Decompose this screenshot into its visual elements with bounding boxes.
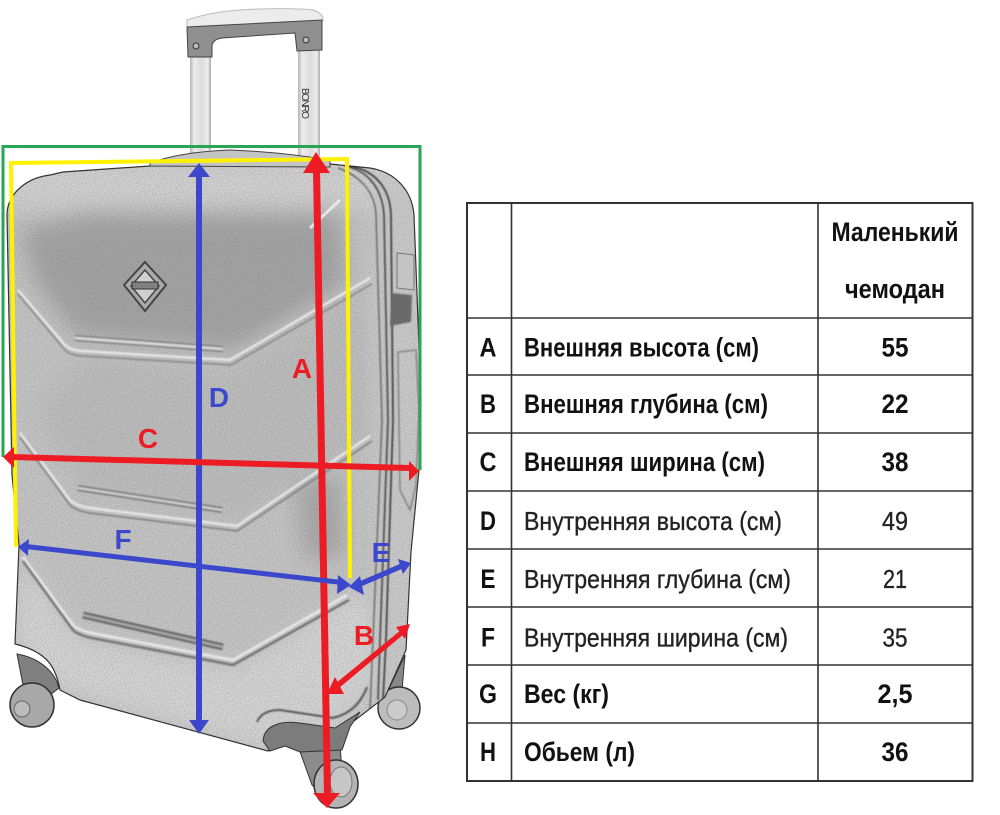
arrow F: inner width	[18, 539, 351, 594]
row A: A	[480, 332, 496, 362]
outline: yellow inner box	[11, 159, 350, 578]
table header	[832, 217, 958, 304]
row G: Вес (кг)	[524, 679, 609, 709]
arrow E: inner depth	[349, 559, 411, 595]
label E: E	[372, 537, 390, 568]
row F: 35	[882, 622, 908, 652]
row H: Обьем (л)	[524, 737, 635, 767]
icon: rear right wheel	[378, 655, 420, 729]
row C	[480, 447, 908, 477]
top carry handle	[150, 150, 330, 167]
label D: D	[209, 382, 229, 413]
row D: 49	[882, 506, 908, 536]
row H: H	[480, 737, 496, 767]
arrow B: outer depth	[327, 624, 410, 694]
label B: B	[354, 620, 374, 651]
label C: C	[138, 423, 158, 454]
label A: A	[292, 353, 312, 384]
lock	[390, 293, 412, 326]
row F: F	[481, 622, 495, 652]
arrow C: outer width	[3, 447, 419, 481]
row C: 38	[882, 447, 908, 477]
icon: telescopic handle: BONRO	[299, 88, 310, 119]
row F: Внутренняя ширина (см)	[524, 622, 788, 652]
icon: rear left wheel	[10, 654, 59, 727]
row C: Внешняя ширина (см)	[524, 447, 765, 477]
row E: 21	[883, 564, 907, 594]
row B	[480, 389, 908, 419]
row G	[479, 679, 912, 709]
row G: G	[479, 679, 497, 709]
row D	[480, 506, 908, 536]
row C: C	[480, 447, 496, 477]
row G: 2,5	[878, 679, 912, 709]
outline: green outer box	[3, 146, 420, 470]
table header: Маленький	[832, 217, 958, 247]
row H: 36	[882, 737, 908, 767]
arrow D: inner height	[188, 163, 210, 734]
table: suitcase dimensions	[467, 203, 972, 781]
table header: чемодан	[845, 274, 945, 304]
row B: Внешняя глубина (см)	[524, 389, 768, 419]
row B: B	[480, 389, 496, 419]
suitcase body	[0, 155, 430, 760]
row E: E	[480, 564, 496, 594]
chevron ribs	[18, 166, 419, 722]
icon: brand logo diamond	[124, 262, 166, 311]
row E: Внутренняя глубина (см)	[524, 564, 791, 594]
side zip lines	[345, 166, 388, 700]
row B: 22	[882, 389, 908, 419]
arrow A: outer height	[303, 152, 340, 808]
row A: 55	[882, 332, 908, 362]
icon: telescopic handle	[187, 9, 323, 156]
row F	[481, 622, 908, 652]
row A	[480, 332, 908, 362]
icon: front wheel and strut	[263, 712, 360, 808]
label F: F	[114, 524, 132, 555]
row D: Внутренняя высота (см)	[524, 506, 782, 536]
row H	[480, 737, 908, 767]
row A: Внешняя высота (см)	[524, 332, 759, 362]
table grid	[467, 203, 972, 781]
row D: D	[480, 506, 496, 536]
photo: suitcase	[0, 9, 430, 808]
